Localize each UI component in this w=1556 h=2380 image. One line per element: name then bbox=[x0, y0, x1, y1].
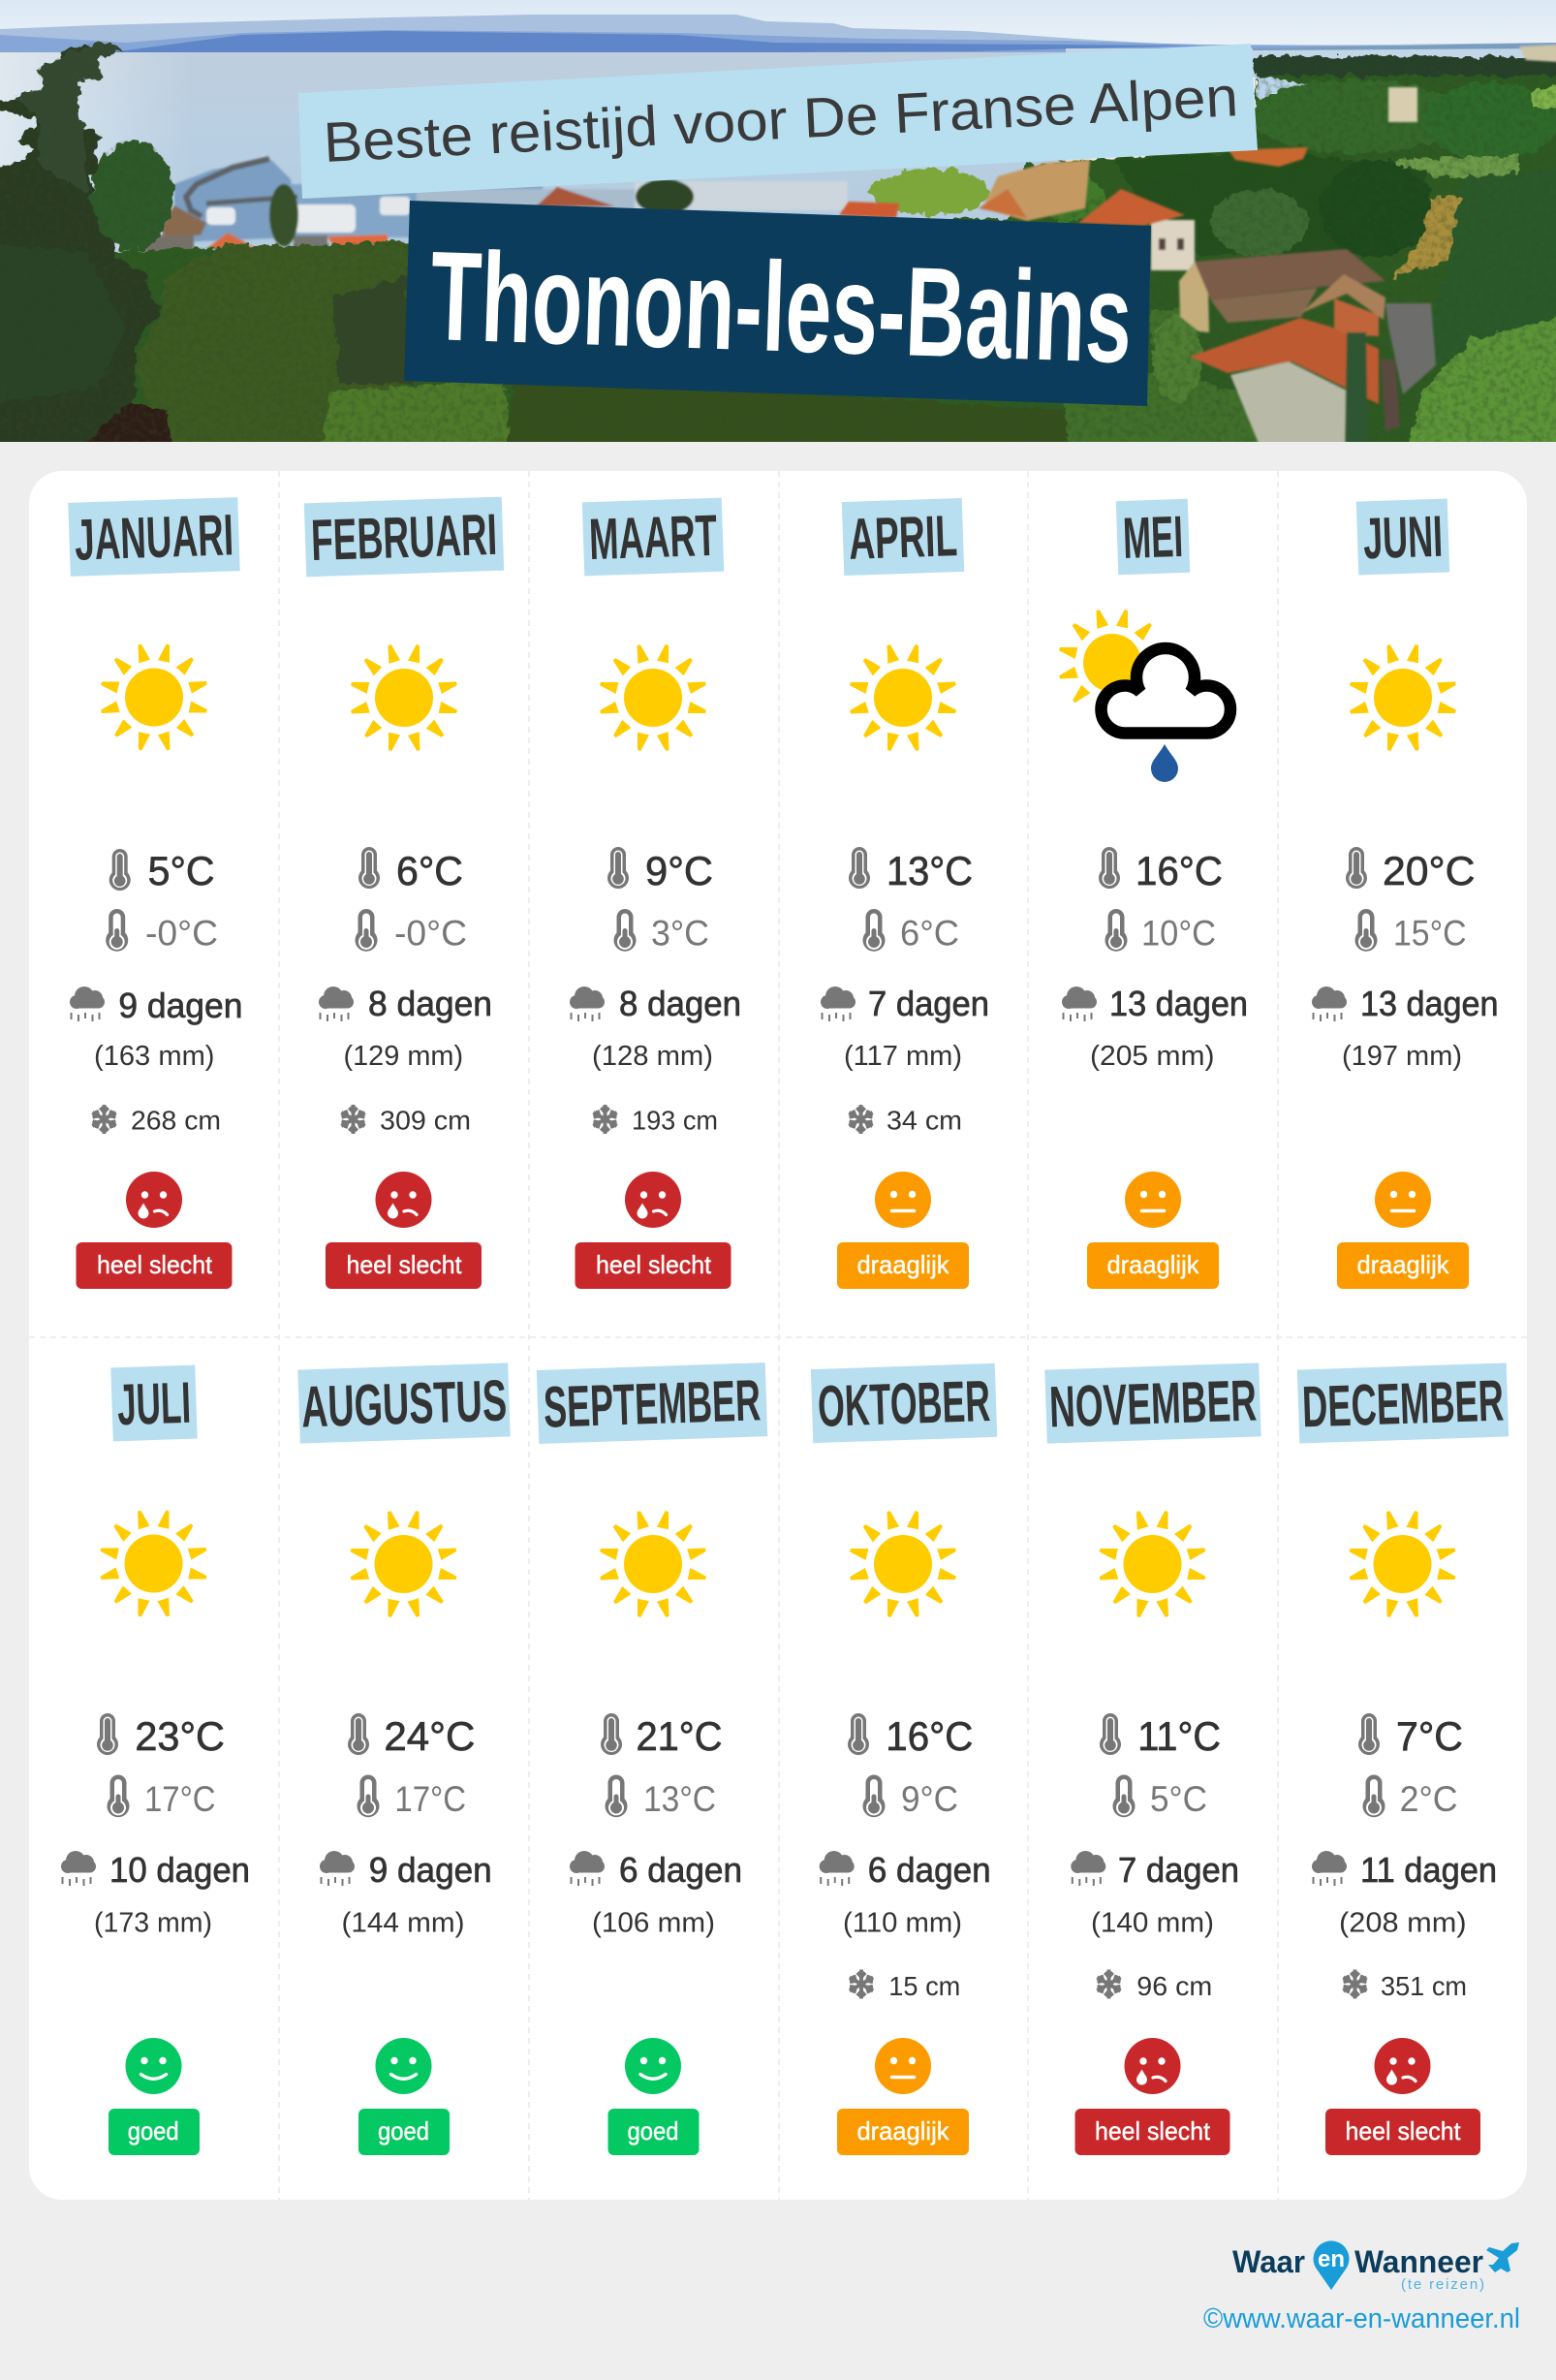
foliage texture bbox=[0, 39, 1556, 442]
maximum temperature: 16°C bbox=[1136, 848, 1223, 893]
rain days: 6 dagen bbox=[868, 1850, 991, 1890]
minimum temperature bbox=[614, 909, 709, 954]
precipitation: (128 mm) bbox=[592, 1041, 713, 1072]
precipitation: (106 mm) bbox=[592, 1907, 715, 1938]
rain days: 9 dagen bbox=[369, 1850, 492, 1890]
snowfall: 34 cm bbox=[887, 1105, 962, 1136]
rating badge: goed bbox=[378, 2116, 429, 2145]
minimum temperature: 6°C bbox=[900, 913, 959, 954]
maximum temperature: 7°C bbox=[1396, 1713, 1463, 1759]
rating badge bbox=[1087, 1242, 1219, 1289]
banner: subtitle bbox=[298, 44, 1258, 199]
rating badge: draaglijk bbox=[1356, 1250, 1449, 1279]
column: augustus bbox=[297, 1362, 511, 2155]
icon: sun bbox=[849, 643, 957, 752]
rain days: 11 dagen bbox=[1360, 1850, 1497, 1890]
banner: city title: Thonon-les-Bains bbox=[428, 224, 1135, 390]
rating face: draaglijk bbox=[875, 2038, 931, 2094]
maximum temperature: 13°C bbox=[887, 848, 973, 893]
rating face: goed bbox=[126, 2038, 182, 2094]
icon: sun bbox=[599, 1510, 707, 1618]
column: januari bbox=[68, 497, 242, 1289]
precipitation: (173 mm) bbox=[94, 1907, 212, 1938]
month label: maart bbox=[582, 498, 724, 576]
maximum temperature: 21°C bbox=[636, 1713, 723, 1759]
minimum temperature bbox=[107, 1775, 215, 1819]
logo: Waar en Wanneer: Wanneer bbox=[1354, 2244, 1483, 2279]
snowfall: 96 cm bbox=[1136, 1971, 1212, 2001]
rain days bbox=[1071, 1850, 1239, 1890]
precipitation: (129 mm) bbox=[343, 1041, 463, 1072]
maximum temperature bbox=[1346, 847, 1475, 893]
precipitation: (205 mm) bbox=[1090, 1041, 1215, 1072]
rating badge bbox=[109, 2109, 200, 2155]
maximum temperature: 11°C bbox=[1137, 1713, 1221, 1759]
icon: sun bbox=[1349, 643, 1457, 752]
maximum temperature bbox=[1099, 847, 1223, 893]
panel: climate calendar card bbox=[29, 471, 1527, 2200]
rain days: 13 dagen bbox=[1109, 984, 1248, 1023]
rating badge bbox=[608, 2109, 700, 2155]
minimum temperature bbox=[1105, 909, 1216, 954]
month label: april bbox=[842, 498, 964, 576]
icon: airplane bbox=[1486, 2242, 1519, 2272]
snowfall bbox=[339, 1105, 471, 1136]
maximum temperature bbox=[848, 1713, 973, 1759]
column: december bbox=[1297, 1362, 1509, 2155]
rating badge bbox=[358, 2109, 450, 2155]
minimum temperature: 17°C bbox=[394, 1779, 466, 1819]
minimum temperature bbox=[106, 909, 218, 954]
rating badge bbox=[1075, 2109, 1230, 2155]
minimum temperature: 5°C bbox=[1150, 1779, 1207, 1819]
rating face: draaglijk bbox=[875, 1172, 931, 1228]
maximum temperature: 9°C bbox=[645, 848, 713, 893]
website credit: ©www.waar-en-wanneer.nl bbox=[1203, 2303, 1520, 2334]
minimum temperature: -0°C bbox=[145, 913, 218, 954]
maximum temperature bbox=[358, 847, 463, 893]
logo: Waar en Wanneer: en bbox=[1318, 2246, 1345, 2272]
snowfall: 15 cm bbox=[888, 1971, 960, 2001]
icon: sun bbox=[849, 1510, 957, 1618]
month label: augustus bbox=[297, 1362, 511, 1444]
icon: sun bbox=[350, 643, 458, 752]
column: februari bbox=[304, 497, 504, 1289]
maximum temperature bbox=[1100, 1713, 1221, 1759]
icon: sun bbox=[100, 643, 208, 751]
rating face: heel slecht bbox=[1374, 2038, 1430, 2094]
minimum temperature: 13°C bbox=[643, 1779, 716, 1819]
rain days: 9 dagen bbox=[118, 986, 242, 1025]
maximum temperature: 23°C bbox=[135, 1713, 225, 1759]
rain days: 6 dagen bbox=[619, 1850, 742, 1890]
maximum temperature bbox=[601, 1713, 723, 1759]
icon: sun bbox=[599, 643, 707, 752]
snowfall: 193 cm bbox=[632, 1105, 718, 1136]
rating badge bbox=[576, 1242, 731, 1289]
rain days: 8 dagen bbox=[619, 984, 741, 1023]
snowfall bbox=[1095, 1969, 1212, 2001]
rating badge bbox=[76, 1242, 233, 1289]
rating face: goed bbox=[376, 2038, 432, 2094]
precipitation: (197 mm) bbox=[1342, 1041, 1462, 1072]
minimum temperature: -0°C bbox=[394, 913, 467, 954]
rating face: heel slecht bbox=[625, 1172, 681, 1228]
precipitation: (208 mm) bbox=[1339, 1907, 1467, 1938]
column: april bbox=[821, 498, 989, 1289]
rain days: 10 dagen bbox=[109, 1850, 250, 1890]
rating badge bbox=[837, 1242, 969, 1289]
rating face: heel slecht bbox=[1124, 2038, 1180, 2094]
column: juli bbox=[61, 1365, 250, 2155]
minimum temperature: 10°C bbox=[1141, 913, 1216, 954]
column: maart bbox=[570, 498, 741, 1289]
maximum temperature: 6°C bbox=[396, 848, 463, 893]
minimum temperature: 2°C bbox=[1400, 1779, 1458, 1819]
month label: januari: JANUARI bbox=[74, 502, 234, 573]
minimum temperature bbox=[605, 1775, 716, 1819]
rating badge bbox=[326, 1242, 482, 1289]
rating badge: heel slecht bbox=[347, 1250, 462, 1279]
precipitation: (144 mm) bbox=[341, 1907, 465, 1938]
rating badge: heel slecht bbox=[1095, 2116, 1211, 2145]
minimum temperature: 9°C bbox=[901, 1779, 958, 1819]
minimum temperature bbox=[862, 909, 959, 954]
month label: september: SEPTEMBER bbox=[543, 1367, 762, 1440]
maximum temperature bbox=[849, 847, 973, 893]
minimum temperature bbox=[1354, 909, 1467, 954]
precipitation: (140 mm) bbox=[1091, 1907, 1214, 1938]
month label: oktober: OKTOBER bbox=[817, 1368, 991, 1439]
village buildings bbox=[839, 45, 1556, 446]
month label: november bbox=[1044, 1362, 1261, 1444]
minimum temperature: 17°C bbox=[144, 1779, 215, 1819]
snowfall bbox=[1341, 1969, 1467, 2001]
minimum temperature bbox=[1362, 1775, 1458, 1819]
rating badge: goed bbox=[128, 2116, 179, 2145]
icon: sun bbox=[1349, 1510, 1456, 1618]
month label: oktober bbox=[811, 1363, 997, 1443]
rating face: heel slecht bbox=[126, 1172, 182, 1228]
maximum temperature: 24°C bbox=[384, 1713, 475, 1759]
minimum temperature bbox=[355, 909, 467, 954]
rating face: draaglijk bbox=[1375, 1172, 1431, 1228]
month label: april: APRIL bbox=[848, 503, 958, 572]
month label: augustus: AUGUSTUS bbox=[300, 1368, 508, 1439]
rating badge bbox=[1325, 2109, 1480, 2155]
rating badge: goed bbox=[628, 2116, 678, 2145]
month label: november: NOVEMBER bbox=[1048, 1367, 1258, 1440]
banner: city title bbox=[404, 201, 1151, 406]
snowfall: 309 cm bbox=[380, 1105, 471, 1136]
maximum temperature: 20°C bbox=[1383, 848, 1475, 893]
rating badge: draaglijk bbox=[856, 2116, 949, 2145]
month label: juli: JULI bbox=[116, 1370, 192, 1437]
snowfall: 268 cm bbox=[131, 1105, 221, 1136]
rating badge: heel slecht bbox=[97, 1250, 213, 1279]
icon: sun bbox=[100, 1510, 207, 1617]
snowfall: 351 cm bbox=[1381, 1971, 1467, 2001]
month label: juni bbox=[1356, 498, 1449, 576]
rain days bbox=[821, 984, 989, 1023]
snowfall bbox=[847, 1105, 962, 1136]
icon: sun bbox=[350, 1510, 457, 1618]
month label: januari bbox=[68, 497, 240, 577]
snowfall bbox=[90, 1105, 221, 1136]
rain days: 7 dagen bbox=[1118, 1850, 1239, 1890]
snowfall bbox=[848, 1969, 960, 2001]
harbour bbox=[143, 155, 849, 252]
rain days bbox=[570, 984, 741, 1023]
rating face: goed bbox=[625, 2038, 681, 2094]
banner: subtitle: Beste reistijd voor De Franse Alpen bbox=[322, 65, 1239, 174]
rating badge: draaglijk bbox=[856, 1250, 949, 1279]
foliage masses bbox=[0, 42, 1556, 475]
column: november bbox=[1044, 1362, 1261, 2155]
column: september bbox=[537, 1362, 767, 2155]
month label: juli bbox=[110, 1365, 198, 1441]
column: oktober bbox=[811, 1363, 997, 2155]
month label: juni: JUNI bbox=[1362, 504, 1444, 571]
month label: maart: MAART bbox=[588, 503, 718, 572]
minimum temperature bbox=[862, 1775, 958, 1819]
column: juni bbox=[1312, 498, 1498, 1289]
maximum temperature: 16°C bbox=[886, 1713, 973, 1759]
precipitation: (163 mm) bbox=[94, 1041, 215, 1072]
rain days: 8 dagen bbox=[368, 984, 492, 1023]
icon: sun bbox=[1099, 1510, 1206, 1618]
logo: Waar en Wanneer: (te reizen) bbox=[1401, 2276, 1484, 2293]
maximum temperature: 5°C bbox=[148, 848, 215, 893]
month label: februari: FEBRUARI bbox=[310, 502, 498, 573]
maximum temperature bbox=[607, 847, 713, 893]
precipitation: (110 mm) bbox=[843, 1907, 962, 1938]
minimum temperature: 15°C bbox=[1393, 913, 1467, 954]
round tree bbox=[92, 141, 173, 250]
column: mei bbox=[1058, 499, 1248, 1289]
month label: september bbox=[537, 1362, 767, 1444]
rating badge bbox=[837, 2109, 969, 2155]
rating badge: heel slecht bbox=[1345, 2116, 1461, 2145]
rain days: 13 dagen bbox=[1360, 984, 1498, 1023]
month label: mei bbox=[1116, 499, 1190, 575]
logo: Waar en Wanneer: Waar bbox=[1232, 2244, 1305, 2279]
maximum temperature bbox=[109, 848, 215, 893]
header photo: lake, mountains and village bbox=[0, 0, 1556, 475]
minimum temperature bbox=[1112, 1775, 1207, 1819]
minimum temperature bbox=[357, 1775, 466, 1819]
rating face: draaglijk bbox=[1125, 1172, 1181, 1228]
minimum temperature: 3°C bbox=[651, 913, 709, 954]
rating face: heel slecht bbox=[376, 1172, 432, 1228]
rating badge bbox=[1337, 1242, 1469, 1289]
snowfall bbox=[591, 1105, 718, 1136]
month label: mei: MEI bbox=[1122, 504, 1184, 571]
icon: map pin bbox=[1314, 2240, 1349, 2290]
rain days: 7 dagen bbox=[868, 984, 989, 1023]
maximum temperature bbox=[97, 1713, 225, 1759]
precipitation: (117 mm) bbox=[844, 1041, 962, 1072]
logo: Waar en Wanneer bbox=[1232, 2240, 1519, 2293]
rating badge: heel slecht bbox=[596, 1250, 712, 1279]
rating badge: draaglijk bbox=[1106, 1250, 1199, 1279]
maximum temperature bbox=[1358, 1713, 1463, 1759]
icon: sun behind rain cloud bbox=[1058, 609, 1230, 782]
month label: februari bbox=[304, 497, 504, 577]
